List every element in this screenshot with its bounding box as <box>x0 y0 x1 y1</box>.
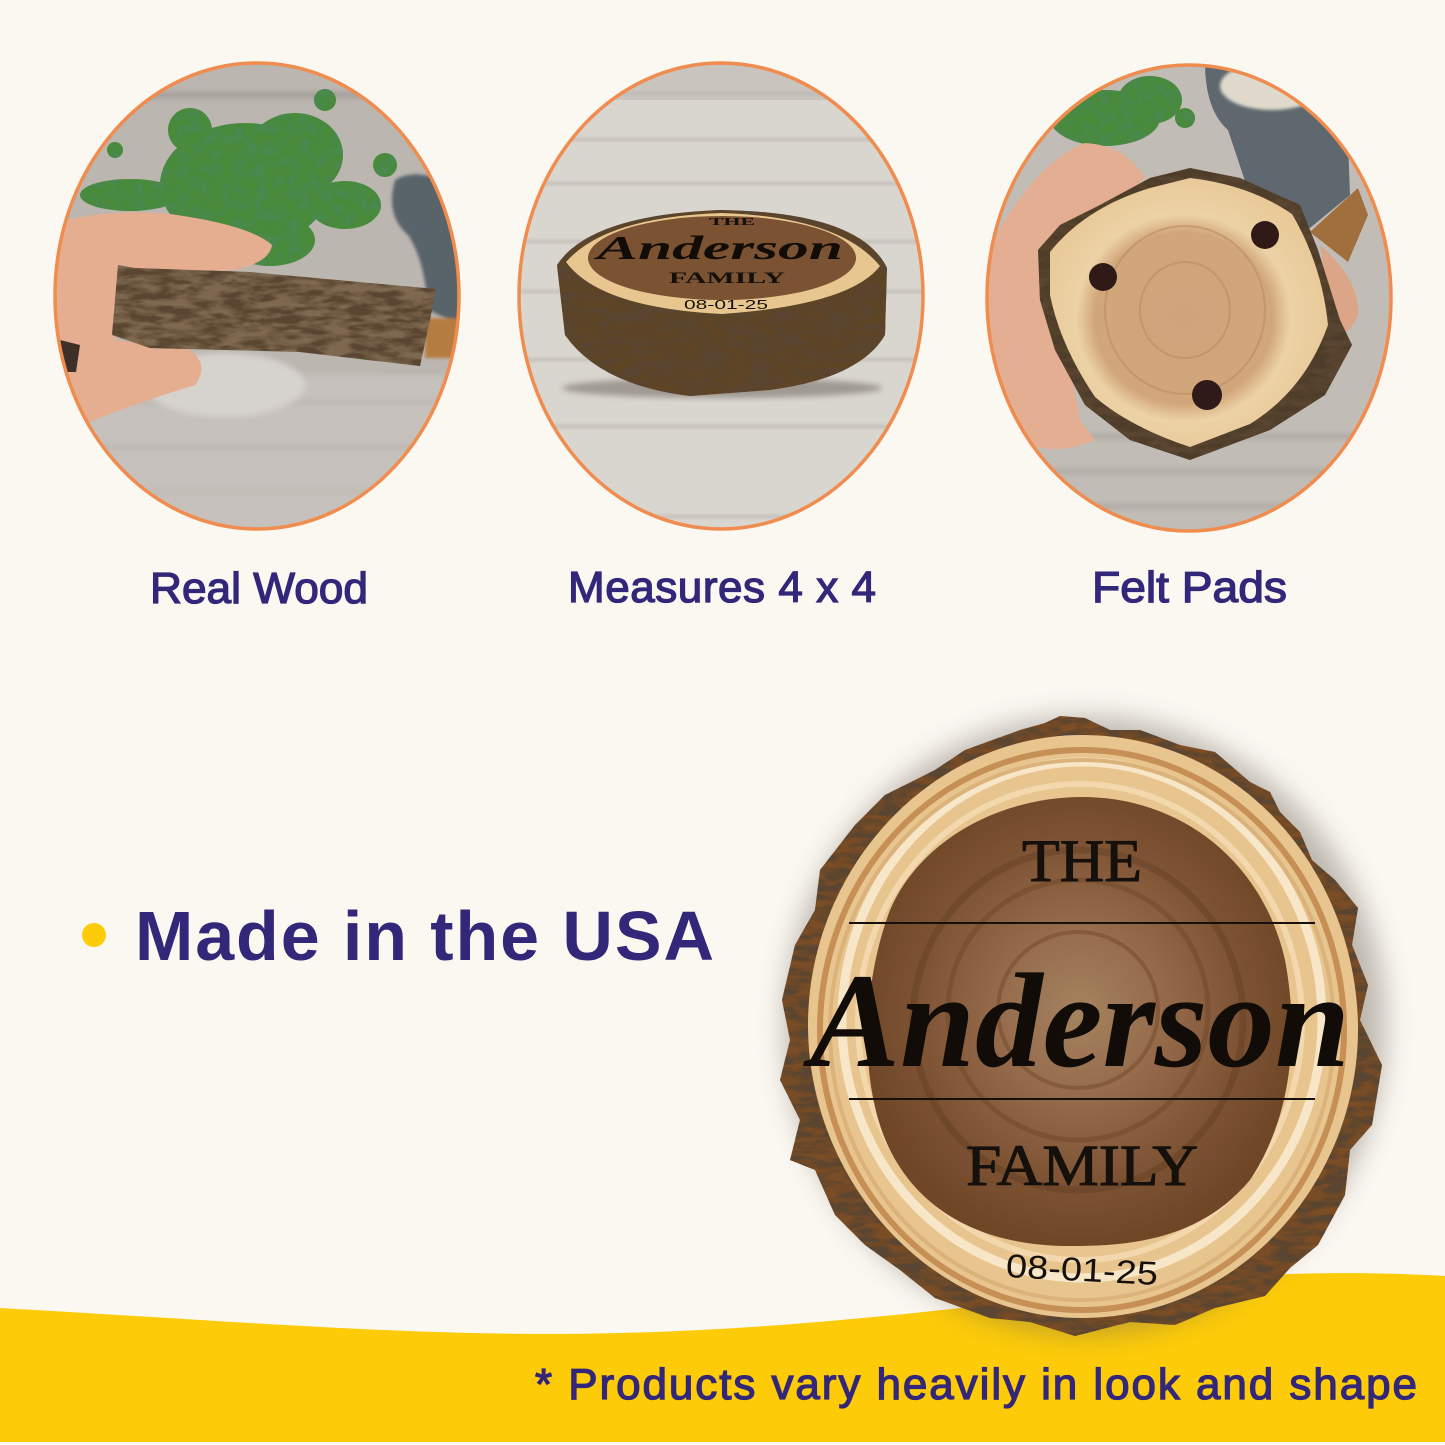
yellow wave footer <box>0 1273 1445 1442</box>
felt pads <box>1089 263 1117 291</box>
photo circle: measures <box>515 60 927 532</box>
feature text: Made in the USA <box>135 897 714 975</box>
photo circle: measures: THE <box>709 216 755 228</box>
engraved rule top <box>849 922 1315 924</box>
engraved rule bottom <box>849 1098 1315 1100</box>
bark edge <box>780 716 1382 1336</box>
engraved: FAMILY: FAMILY <box>966 1133 1198 1198</box>
caption: real wood: Real Wood <box>150 564 368 613</box>
photo circle: measures: FAMILY <box>669 270 786 287</box>
coaster top <box>566 213 880 314</box>
sapwood <box>808 735 1358 1318</box>
photo circle: felt pads <box>983 62 1395 534</box>
heartwood <box>868 797 1292 1246</box>
bark slab <box>112 265 436 366</box>
hand <box>983 143 1145 449</box>
hand <box>50 212 272 422</box>
plant <box>80 89 397 266</box>
engraved: THE: THE <box>1022 828 1142 894</box>
engraved: Anderson: Anderson <box>803 947 1350 1096</box>
yellow bullet <box>82 923 106 947</box>
coaster underside <box>1038 168 1352 460</box>
photo circle: measures: 08-01-25 <box>684 297 768 312</box>
engraved: date: 08-01-25 <box>1005 1247 1159 1292</box>
coaster bark body <box>557 210 887 396</box>
caption: measures: Measures 4 x 4 <box>568 563 876 612</box>
caption: felt pads: Felt Pads <box>1092 563 1287 612</box>
photo circle: real wood <box>50 60 462 535</box>
photo circle: measures: Anderson <box>593 230 843 267</box>
footnote: * Products vary heavily in look and shape <box>535 1360 1417 1409</box>
large coaster <box>780 716 1385 1336</box>
